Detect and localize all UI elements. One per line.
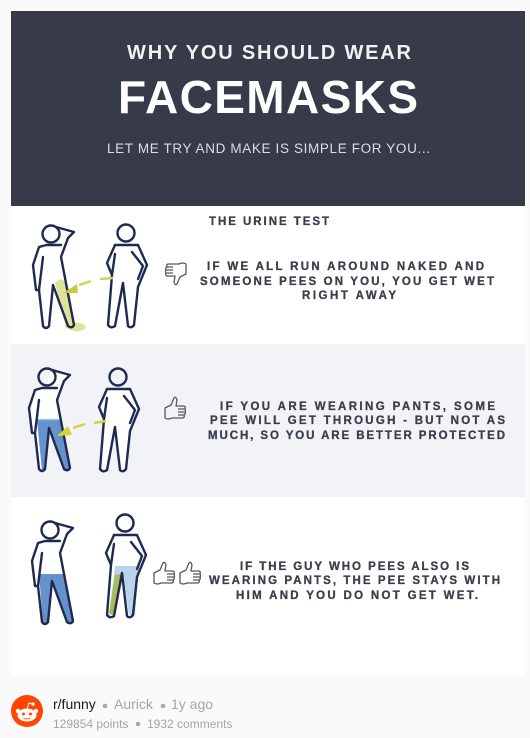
post meta: 1932 comments: [147, 717, 232, 731]
text: pants explanation: MUCH, SO YOU ARE BETTER PROTECTED: [208, 430, 505, 442]
icon: thumbs down: [166, 263, 186, 285]
arrow: urine stream: [63, 278, 113, 293]
figure: person scratching head: [33, 226, 74, 328]
post meta: Aurick: [114, 696, 154, 712]
urine contained: [109, 573, 124, 615]
title: facemasks: FACEMASKS: [118, 71, 418, 123]
urine stain: [55, 279, 86, 332]
panel: one wearing pants: [11, 344, 525, 497]
figure: person in pants: [32, 522, 73, 624]
text: both pants explanation: [209, 561, 500, 602]
post meta: r/funny: [53, 696, 96, 712]
text: pants explanation: [208, 401, 505, 442]
panel: naked: [11, 206, 525, 344]
arrow: urine stream: [57, 421, 106, 436]
text: naked explanation: [200, 261, 494, 302]
header panel: [11, 11, 525, 206]
heading: why you should wear: WHY YOU SHOULD WEAR: [127, 42, 412, 64]
icon: reddit logo: [11, 695, 43, 727]
text: both pants explanation: WEARING PANTS, THE PEE STAYS WITH: [209, 575, 500, 587]
figure fill: white bodies: [29, 370, 139, 471]
figure: person in pants peeing: [106, 514, 146, 617]
text: naked explanation: IF WE ALL RUN AROUND NAKED AND: [207, 261, 484, 273]
text: naked explanation: RIGHT AWAY: [302, 290, 396, 302]
pants: light blue: [109, 566, 139, 615]
post meta: 129854 points: [53, 717, 128, 731]
subtitle: LET ME TRY AND MAKE IS SIMPLE FOR YOU...: [107, 141, 430, 156]
icons: two thumbs up: [154, 562, 200, 584]
text: naked explanation: SOMEONE PEES ON YOU, YOU GET WET: [200, 276, 494, 288]
pants: blue: [39, 574, 74, 624]
heading: the urine test: THE URINE TEST: [209, 216, 329, 228]
waistband: [37, 419, 61, 421]
panel: both wearing pants: [11, 497, 525, 676]
post meta: 1y ago: [171, 696, 213, 712]
figure: person peeing: [107, 224, 147, 327]
text: pants explanation: IF YOU ARE WEARING PANTS, SOME: [220, 401, 495, 413]
figure: person in pants: [29, 368, 70, 471]
post meta: [53, 696, 232, 731]
text: both pants explanation: IF THE GUY WHO PEES ALSO IS: [240, 561, 469, 573]
text: both pants explanation: HIM AND YOU DO NOT GET WET.: [236, 590, 478, 602]
icon: thumbs up: [165, 397, 186, 419]
text: pants explanation: PEE WILL GET THROUGH - BUT NOT AS: [210, 415, 505, 427]
pants: blue: [37, 420, 70, 471]
figure: person peeing: [99, 368, 139, 471]
